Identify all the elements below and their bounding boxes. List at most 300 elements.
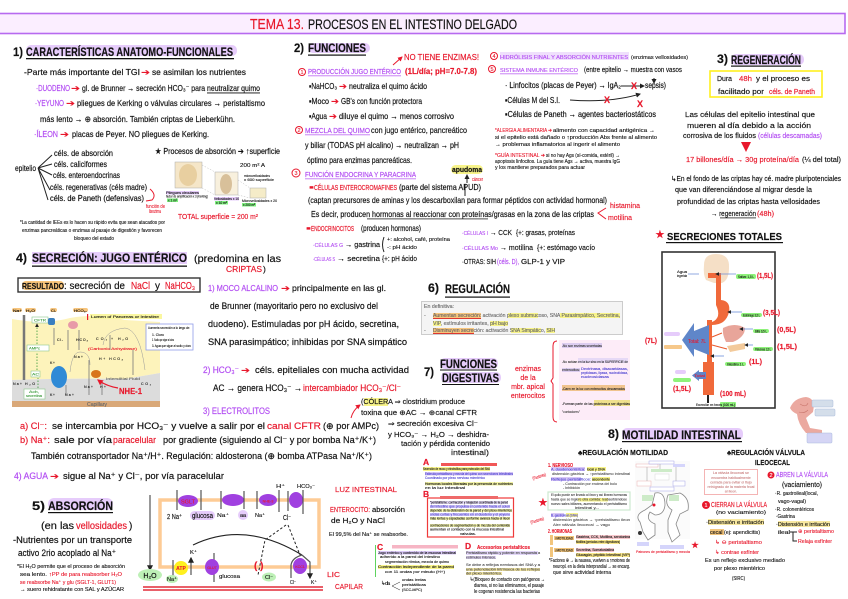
closed valve list: ↳ contrae esfínter bbox=[715, 549, 759, 556]
function 4: hidrólisis final: (enzimas vellosidades) bbox=[631, 55, 688, 61]
function 5: sistema inmune entérico: · Linfocitos (placas de Peyer) → IgA₂ bbox=[505, 80, 621, 90]
absorption surface figure: Microvellosidades x 20 bbox=[242, 199, 277, 203]
function 4: hidrólisis final bbox=[490, 52, 688, 61]
oesophagus and stomach bbox=[708, 273, 729, 325]
summary box: - bbox=[424, 328, 426, 334]
blue legend box: 3. Agua que sigue al sodio y cloro bbox=[152, 344, 191, 348]
epithelium cell types tree: epitelio bbox=[15, 163, 36, 173]
function 4: hidrólisis final: 4 bbox=[492, 54, 496, 60]
text: moco alcalino: SNA parasimpático; inhibidas por SNA simpático bbox=[208, 337, 407, 347]
absorption surface figure: x 1 m² bbox=[168, 198, 178, 202]
diagram: epithelial secretion cell: Na+ bbox=[13, 382, 22, 386]
note: cólera: (CÓLERA ⇒ clostridium produce bbox=[361, 397, 465, 406]
pink panel: enzymes: -No son enzimas secretadas bbox=[562, 343, 602, 348]
diagram: enterocyte absorption bbox=[138, 483, 323, 591]
yellow callout box: facilitado por bbox=[718, 89, 765, 96]
callout: no enzymes: NO TIENE ENZIMAS! bbox=[404, 52, 479, 62]
diagram: epithelial secretion cell: CFTR bbox=[34, 318, 46, 322]
summary box: Aumentan secreción: activación plexo submucoso, SNA Parasimpático, Secretina, bbox=[433, 313, 620, 319]
endocrine cell list: ·OTRAS: SIH bbox=[462, 259, 496, 266]
heading: section 2: 2) bbox=[294, 41, 304, 55]
closed valve list: 1 bbox=[704, 503, 708, 509]
notes: alergia and guía intestinal: y los mantiene preparados para actuar bbox=[495, 165, 585, 171]
endocrine cell list: {+: pH ácido bbox=[382, 256, 417, 263]
function 3: endocrina y paracrina: CÉLULAS ENTEROCROMAFINES bbox=[314, 183, 397, 192]
footnote on cell turnover: enzimas pancreáticas o enzimas al pasaje de digestión y favorecen bbox=[22, 228, 162, 234]
ATP pump bbox=[174, 561, 188, 575]
diagram: enterocyte absorption: 2 Na⁺ bbox=[167, 513, 182, 521]
heading: section 6: 6) bbox=[428, 281, 439, 295]
title bar: TEMA 13. bbox=[250, 17, 304, 33]
transporter: KCC1: KCC1 bbox=[295, 565, 305, 569]
diagram: enterocyte absorption: Cl⁻ bbox=[290, 580, 296, 586]
sodium pill bbox=[166, 575, 178, 583]
heading: section 2: FUNCIONES bbox=[308, 41, 366, 55]
function 5: sistema inmune entérico: SISTEMA INMUNE ENTÉRICO bbox=[500, 67, 579, 74]
secretion labels: Páncreas 1,5 L bbox=[755, 348, 771, 352]
heading: secreciones totales: SECRECIONES TOTALES bbox=[667, 231, 782, 243]
label: brush border enzymes: enzimas bbox=[515, 366, 542, 373]
text: HCO3: AC → genera HCO₃⁻ → bbox=[213, 383, 302, 393]
function 3: endocrina y paracrina: motilina bbox=[608, 215, 632, 222]
block B: red framed notes: contracciones de segmentación y de mezcla del contenido bbox=[430, 524, 510, 528]
absorption surface figure: x 200 m² bbox=[243, 203, 256, 207]
function 3: endocrina y paracrina: (producen hormonas) bbox=[361, 223, 421, 233]
diagram: epithelial secretion cell: Na+ bbox=[74, 355, 83, 359]
diagram: epithelial secretion cell: Cl- bbox=[57, 338, 64, 342]
function 3: endocrina y paracrina: ▪ bbox=[309, 182, 314, 192]
callout: no enzymes bbox=[393, 52, 479, 65]
litre values bbox=[645, 273, 797, 398]
section 3: regeneración bbox=[671, 52, 841, 218]
label: brush border enzymes bbox=[511, 341, 557, 422]
note: factores: neuropl. en la dieta interprandial → se encarg. bbox=[553, 564, 630, 570]
summary box: En definitiva: bbox=[424, 304, 454, 310]
diagram: enterocyte absorption: K⁺ bbox=[311, 579, 317, 586]
text: cell turnover: corrosiva de los fluidos bbox=[683, 133, 757, 140]
text: HCO3: céls. epiteliales con mucha actividad bbox=[255, 365, 409, 375]
text: absorption notes: vellosidades bbox=[76, 521, 127, 532]
note: cólera bbox=[351, 397, 490, 457]
diagram: epithelial secretion cell: H+ HCO₃ bbox=[99, 357, 124, 361]
endocrine cell list: → motilina bbox=[500, 245, 533, 252]
note: cólera: tación y pérdida contenido bbox=[401, 441, 490, 448]
pink panel: enzymes: -No actúan en la luz sino en la SUPERFICIE de bbox=[562, 359, 629, 364]
block B: red framed notes: depende de la distensión de la pared y del plexo mientérico bbox=[430, 508, 512, 512]
block C: notes: C bbox=[377, 542, 383, 552]
hormones bbox=[548, 529, 630, 557]
red star: ★ bbox=[538, 497, 548, 509]
labels: compartments: LIC bbox=[327, 572, 340, 579]
endocrine cell list: ·CÉLULAS G bbox=[313, 242, 343, 249]
result box: NaHCO₃ bbox=[165, 281, 195, 292]
litre values: (0,5L) bbox=[777, 327, 796, 334]
block A: notes: Secreción de moco y electrolitos para protección del SNA bbox=[423, 467, 490, 471]
endocrine cell list: ·CÉLULAS Mo bbox=[462, 245, 498, 252]
blue legend box: Aumenta secreción a lo largo de: bbox=[148, 326, 190, 330]
pink panel: enzymes: enterocitos: bbox=[562, 367, 580, 372]
block D: accesorios peristalticos: Accesorios peristalticos bbox=[477, 545, 530, 551]
yellow callout box: y el proceso es bbox=[756, 76, 811, 83]
block B: red framed notes: más lentas y espaciadas conforme avanza hacia el íleon bbox=[430, 516, 510, 520]
text: electrolitos: por gradiente (siguiendo al Cl⁻ y por bomba Na⁺/K⁺) bbox=[163, 435, 376, 445]
function 3: endocrina y paracrina: ▪ bbox=[306, 223, 311, 233]
block C: notes: ondas lentas bbox=[402, 578, 426, 582]
text: parts of the small intestine: gl. de Brunner → secreción HCO₃⁻ para neutralizar quimo bbox=[82, 83, 260, 93]
summary box: Disminuyen secreción: activación SNA Simpático, SIH bbox=[433, 328, 555, 334]
function 2: mezcla del quimo bbox=[296, 125, 467, 165]
gastroileal reflex bbox=[530, 513, 630, 527]
endocrine cell list: -: pH ácido bbox=[387, 245, 417, 251]
heading: section 3: REGENERACIÓN bbox=[731, 52, 801, 67]
section 4: secreción jugo entérico bbox=[12, 250, 490, 481]
block C: notes bbox=[375, 542, 458, 592]
diagram: epithelial secretion cell: secretina bbox=[26, 394, 42, 398]
block C: notes: adherido a la pared del intestino bbox=[380, 555, 440, 559]
note: factores: que sirve actividad interna bbox=[553, 570, 612, 576]
text: parts of the small intestine: ➔ bbox=[141, 67, 150, 77]
heading: section 4: SECRECIÓN: JUGO ENTÉRICO bbox=[32, 250, 187, 265]
note: cólera: y HCO₃⁻ → H₂O → deshidra- bbox=[388, 432, 490, 439]
nervous factors: distensión gástrica → ↑peristaltismo intestinal bbox=[552, 472, 630, 476]
absorption surface figure: microvellosidades bbox=[244, 174, 270, 178]
yellow callout box: céls. de Paneth bbox=[769, 89, 815, 96]
block D: accesorios peristalticos: del plexo mientérico. bbox=[466, 572, 502, 576]
text: absorption notes: se reabsorbe Na⁺ y glu (SGLT-1, GLUT1) bbox=[20, 579, 116, 586]
text: absorption notes: -Nutrientes por un transporte bbox=[13, 535, 132, 545]
text: electrolitos: paracelular bbox=[113, 435, 156, 445]
nervous factors: ascendente bbox=[592, 478, 610, 482]
title bar: PROCESOS EN EL INTESTINO DELGADO bbox=[308, 17, 517, 32]
labels: compartments bbox=[327, 487, 408, 591]
nervous factors bbox=[532, 463, 630, 490]
open valve list: Relaja esfínter bbox=[798, 539, 832, 545]
function 1: producción jugo entérico: 1 bbox=[300, 70, 304, 76]
heading: secreciones totales: ★ bbox=[655, 229, 665, 241]
NHE-1 callout: NHE-1 bbox=[119, 386, 142, 396]
text: cell turnover: (células descamadas) bbox=[758, 133, 822, 140]
hormones: Secretina, Somatostatina bbox=[576, 548, 614, 552]
block A: notes: A bbox=[423, 457, 429, 467]
gastroileal reflex: Aire válvula ileocecal → vago bbox=[553, 523, 610, 527]
text: HCO3: intercambiador HCO₃⁻/Cl⁻ bbox=[303, 383, 401, 393]
text: cell turnover: Las células del epitelio intestinal que bbox=[685, 112, 815, 119]
text: parts of the small intestine: ➔ bbox=[71, 83, 80, 93]
text: moco alcalino: 1) MOCO ALCALINO bbox=[208, 283, 278, 293]
text: electrolitos: se intercambia por HCO₃⁻ y vuelve a salir por el bbox=[52, 421, 265, 431]
hormones: Gastrina, CCK, Motilina, serotonina bbox=[576, 535, 630, 539]
left intestine outline bbox=[638, 493, 665, 540]
text: cell turnover bbox=[671, 112, 841, 218]
block A: notes: Coordinado por plexo nervioso mientérico bbox=[425, 476, 485, 480]
block B: red framed notes: B bbox=[423, 489, 429, 499]
text: HCO3: ➔ bbox=[241, 365, 250, 375]
pink panel: enzymes: -Caen en la luz con enterocitos descamados bbox=[562, 386, 625, 391]
section 2: funciones bbox=[292, 41, 688, 266]
closed valve list: ↳ ⊖ peristaltismo bbox=[715, 539, 762, 546]
head bbox=[704, 254, 729, 283]
yellow callout box: 48h bbox=[739, 76, 752, 83]
text: HCO3: 2) HCO₃⁻ bbox=[203, 365, 239, 375]
label: brush border enzymes: de la bbox=[520, 375, 536, 382]
heading: section 4: ) bbox=[263, 264, 266, 274]
footnote on cell turnover: bloqueo del estado bbox=[74, 236, 114, 242]
heading: section 1: 1) bbox=[13, 45, 23, 59]
diagram: epithelial secretion cell: CO₂ bbox=[96, 337, 108, 341]
hormones: Motilina (períodos entre digestiones) bbox=[576, 540, 620, 544]
pink box: ileocecal valve definition: cerrada para evitar el flujo bbox=[710, 480, 752, 484]
green box: hasta que se ingiere otra comida: reabsorbiéndose bbox=[551, 498, 627, 502]
text: electrolitos: sale por vía bbox=[54, 435, 112, 445]
litre values: (3,5L) bbox=[763, 310, 780, 317]
absorption surface figure: x 600 superficie bbox=[244, 178, 274, 182]
pink panel: enzymes: Dextrinasa, disacaridasas, bbox=[581, 367, 628, 371]
text: absorption notes: (en las bbox=[41, 521, 74, 532]
section 8: motilidad intestinal bbox=[578, 427, 834, 582]
text: moco alcalino: ➔ bbox=[281, 283, 290, 293]
closed valve list: (SIRC) bbox=[732, 576, 745, 582]
heading: section 4: CRIPTAS bbox=[226, 264, 262, 274]
section: secreciones totales bbox=[645, 229, 835, 443]
nervous factors: A. duodenoentérica: bbox=[551, 468, 585, 472]
diagram: enterocyte absorption: H⁺ bbox=[276, 483, 285, 490]
function 1: producción jugo entérico: diluye el quimo → menos corrosivo bbox=[339, 111, 454, 121]
endocrine cell list: {+: estómago vacío bbox=[537, 245, 595, 252]
function 5: sistema inmune entérico: sepsis) bbox=[645, 80, 666, 90]
epithelium cell types tree: céls. regenerativas (céls madre) bbox=[50, 182, 147, 192]
absorption surface figure: ★ Procesos de absorción ➔ ↑superficie bbox=[155, 146, 280, 156]
function 3: endocrina y paracrina: cáncer bbox=[472, 177, 483, 183]
text: absorption notes: activo 2rio acoplado al Na⁺ bbox=[18, 548, 116, 558]
diagram: epithelial secretion cell: H₂O bbox=[118, 337, 128, 341]
text: parts of the small intestine: -Parte más importante del TGI bbox=[24, 67, 140, 77]
function 5: sistema inmune entérico: ▪Células de Paneth → agentes bacteriostáticos bbox=[505, 109, 656, 119]
transporter: NHE-3: NHE-3 bbox=[263, 500, 273, 504]
diagram: epithelial secretion cell bbox=[12, 308, 193, 408]
function 1: producción jugo entérico: neutraliza el quimo ácido bbox=[349, 81, 427, 91]
heading: section 4 bbox=[16, 250, 281, 274]
pancreas bbox=[727, 343, 745, 352]
text: parts of the small intestine: se asimilan los nutrientes bbox=[152, 67, 246, 77]
text: parts of the small intestine: ➔ bbox=[60, 129, 69, 139]
block D: accesorios peristalticos: diarrea, si no las eliminamos, el pasaje bbox=[474, 583, 544, 589]
transporter: GLUT: GLUT bbox=[207, 566, 218, 570]
absorption surface figure: factor de amplificación x 3 (Kerking) bbox=[166, 194, 208, 198]
diagram: epithelial secretion cell: (Carbonic Anhydrase) bbox=[88, 347, 137, 351]
diagram: epithelial secretion cell: HCO₃ bbox=[76, 338, 89, 342]
blue arrow: absorbed total bbox=[682, 323, 709, 357]
pink box: ileocecal valve definition: retrógrado de la materia fecal bbox=[708, 485, 755, 489]
heading: section 1 bbox=[13, 44, 237, 59]
pink panel: enzymes bbox=[559, 340, 630, 420]
function 3: endocrina y paracrina: (parte del sistema APUD) bbox=[399, 182, 481, 192]
closed valve list: cecal (ej: apendicitis) bbox=[710, 530, 760, 536]
function 3: endocrina y paracrina: Es decir, producen hormonas al reaccionar con proteínas/grasas en la zona de las criptas bbox=[311, 209, 594, 219]
text: moco alcalino: duodeno). Estimuladas por pH ácido, secretina, bbox=[208, 319, 399, 329]
function 5: sistema inmune entérico: 5 bbox=[490, 67, 494, 73]
diagram: enterocyte absorption: Na⁺ bbox=[255, 512, 265, 519]
nervous factors: - Inhibición bbox=[563, 486, 580, 490]
result box bbox=[18, 278, 200, 292]
note: cólera: intestinal) bbox=[451, 450, 489, 457]
absorption surface figure: x 10 m² bbox=[216, 201, 228, 205]
closed valve list: Es un reflejo exclusivo mediado bbox=[705, 558, 785, 564]
block D: accesorios peristalticos: Peristaltismo rápido y potente en respuesta a bbox=[466, 551, 540, 555]
function 1: producción jugo entérico: GB's con función protectora bbox=[341, 96, 422, 106]
endocrine cell list: ·CÉLULAS S bbox=[313, 256, 335, 263]
text: cell turnover: profundidad de las criptas hasta vellosidades bbox=[677, 199, 821, 206]
heading: section 3: 3) bbox=[717, 52, 728, 66]
chloride pill bbox=[262, 572, 276, 582]
block C: notes: (SCC-MPC) bbox=[402, 588, 422, 592]
endocrine cell list: → gastrina bbox=[345, 242, 380, 249]
endocrine cell list bbox=[313, 230, 595, 266]
diagram: epithelial secretion cell: Interstitial Fluid bbox=[106, 377, 140, 381]
heading: section 6 bbox=[428, 281, 510, 298]
block D: accesorios peristalticos: ↳(Bloqueo de contacto con patógenos → bbox=[470, 576, 545, 583]
diagram: enterocyte absorption: glucosa bbox=[192, 513, 213, 520]
yellow callout box: Dura bbox=[717, 76, 732, 83]
epithelium cell types tree: céls. de Paneth (defensivas) bbox=[50, 193, 144, 203]
section 7: funciones digestivas bbox=[375, 340, 630, 595]
function 3: endocrina y paracrina: 3 bbox=[294, 171, 298, 177]
text: parts of the small intestine: ➔ bbox=[66, 98, 75, 108]
diagram: epithelial secretion cell: H₂O bbox=[26, 309, 35, 313]
nervous factors: 1. NERVIOSO bbox=[548, 463, 574, 469]
transporter: NHE-3 bbox=[259, 494, 277, 506]
labels: compartments: CAPILAR bbox=[335, 584, 363, 591]
text: electrolitos: b) Na⁺: bbox=[20, 435, 50, 445]
small figure: intestine detail bbox=[790, 397, 835, 443]
text: cell turnover: ↳En el fondo de las criptas hay cé. madre pluripotenciales bbox=[671, 175, 841, 183]
closed valve list bbox=[702, 500, 785, 582]
function 1: producción jugo entérico: ➔ bbox=[331, 96, 339, 106]
hormones: ↑MOTILIDAD bbox=[555, 536, 573, 540]
diagram: epithelial secretion cell: Na+ bbox=[65, 393, 74, 397]
right intestine outline bbox=[667, 493, 688, 542]
epithelium cell types tree: función de bbox=[146, 204, 165, 210]
green box: intestinal y... bbox=[575, 506, 599, 510]
heading: section 5: 5) bbox=[32, 499, 45, 513]
block B: red framed notes: "peristaltismo: contracción y relajación coordinada de la pared bbox=[430, 500, 508, 504]
subheading: regulación válvula: ♣REGULACIÓN VÁLVULA bbox=[727, 448, 805, 457]
heading: section 4: 4) bbox=[16, 251, 27, 265]
result box: NaCl bbox=[131, 281, 150, 292]
epithelium cell types tree bbox=[15, 148, 165, 215]
water pill: H₂O bbox=[143, 573, 157, 580]
notes: alergia and guía intestinal: si no hay Ags (sí-comida, estéril) → bbox=[546, 153, 620, 159]
epithelium cell types tree: lisozima bbox=[149, 209, 162, 215]
block C: notes: ↳ da bbox=[381, 580, 391, 587]
open valve list: ·Gastrina bbox=[776, 514, 796, 520]
notes: alergia and guía intestinal: *GUÍA INTESTINAL ➔ bbox=[495, 152, 545, 159]
text: moco alcalino bbox=[208, 283, 407, 347]
heading: section 7: 7) bbox=[424, 365, 434, 379]
notes: alergia and guía intestinal: si el epitelio está dañado o ↑producción Abs frente al alimento bbox=[495, 135, 657, 141]
hormones: 2. HORMONAS bbox=[548, 529, 572, 535]
block D: accesorios peristalticos: estímulos intensos. bbox=[466, 556, 496, 560]
labels: compartments: ENTEROCITO: bbox=[330, 507, 370, 514]
function 3: endocrina y paracrina: FUNCIÓN ENDOCRINA Y PARACRINA bbox=[305, 170, 416, 179]
heading: section 5: ABSORCIÓN bbox=[48, 498, 113, 513]
diagram: epithelial secretion cell: AC bbox=[32, 372, 40, 376]
open valve list: (vaciamiento) bbox=[782, 482, 822, 489]
absorption surface figure: Pliegues circulares bbox=[166, 191, 199, 195]
diagram: epithelial secretion cell: HCO₃- bbox=[74, 309, 88, 313]
open valve list: ABREN LA VÁLVULA bbox=[776, 470, 828, 479]
open valve list: ⊕ peristaltismo bbox=[798, 529, 834, 535]
block B: red framed notes: aumentan el contacto con la mucosa intestinal bbox=[430, 528, 504, 532]
function 5: sistema inmune entérico: (entre epitelio → muestra con vasos bbox=[584, 67, 682, 74]
function 3: endocrina y paracrina: histamina bbox=[610, 203, 640, 210]
labels: compartments: LUZ INTESTINAL bbox=[335, 487, 397, 494]
hormones: Glucagón, péptido intestinal (VIP) bbox=[576, 553, 630, 557]
diagram: motility control bbox=[635, 461, 690, 554]
blue legend box: 1. Cloro bbox=[152, 333, 164, 337]
closed valve list: (no vaciamiento) bbox=[716, 510, 766, 516]
block B: red framed notes: ondas cortas y frecuentes en el duodeno y el yeyuno bbox=[430, 512, 510, 516]
endocrine cell list: +: alcohol, café, proteína bbox=[387, 237, 451, 243]
text: electrolitos bbox=[20, 406, 379, 461]
open valve list: ·R. gastroileal(local, bbox=[775, 491, 818, 497]
liver bbox=[723, 325, 745, 342]
secretion labels: Agua bbox=[677, 270, 687, 274]
text: cell turnover: (48h) bbox=[757, 211, 774, 218]
diagram: enterocyte absorption: glucosa bbox=[219, 574, 241, 580]
pink panel: enzymes: -Forman parte de las proteínas a ser digeridas bbox=[562, 401, 630, 406]
section 1: características anatomo-funcionales bbox=[13, 44, 280, 242]
hormones: ↓MOTILIDAD bbox=[555, 548, 573, 552]
note: cólera: ⇒ secreción excesiva Cl⁻ bbox=[388, 421, 478, 428]
text: parts of the small intestine: pliegues de Kerking o válvulas circulares → peristaltismo bbox=[77, 98, 265, 108]
text: agua: 4) AGUA bbox=[14, 471, 48, 481]
text: cell turnover: (¼ del total) bbox=[802, 157, 841, 164]
text: HCO3 bbox=[203, 365, 409, 393]
text: absorption notes bbox=[13, 521, 132, 593]
sodium pill: Na⁺ bbox=[167, 576, 177, 583]
diagram: enterocyte absorption: K⁺ bbox=[190, 549, 197, 556]
endocrine cell list: GLP-1 y VIP bbox=[521, 259, 565, 266]
heading: section 8: MOTILIDAD INTESTINAL bbox=[622, 428, 741, 442]
gastroileal reflex: B. gastroileal (SNA) bbox=[551, 514, 578, 518]
text: absorption notes: → suero rehidratante con SAL y AZÚCAR bbox=[20, 586, 124, 593]
open valve list: ileal bbox=[778, 530, 790, 536]
block A: notes bbox=[423, 457, 513, 490]
text: moco alcalino: de Brunner (mayoritario pero no exclusivo del bbox=[210, 301, 378, 311]
open valve list bbox=[768, 470, 834, 545]
function 5: sistema inmune entérico: X bbox=[604, 95, 610, 105]
litre values: (100 mL) bbox=[720, 391, 746, 398]
notes: alergia and guía intestinal bbox=[495, 128, 657, 171]
footnote on cell turnover bbox=[20, 220, 165, 242]
litre values: (7L) bbox=[645, 338, 657, 345]
block A: notes: Hormonas locales liberadas por la presencia de nutrientes bbox=[425, 482, 513, 486]
text: electrolitos: canal CFTR bbox=[267, 421, 322, 431]
text: moco alcalino: principalmente en las gl. bbox=[292, 283, 386, 293]
green box: nuevo sales biliares, aumentando el peristaltismo bbox=[551, 502, 627, 506]
function 1: producción jugo entérico: ▪Moco bbox=[309, 96, 329, 106]
diagram: motility control: Patrones de peristaltismo y mezcla bbox=[636, 550, 690, 554]
text: electrolitos: También cotransportador Na⁺/H⁺. Regulación: aldosterona (⊕ bomba ATPasa Na⁺/K⁺) bbox=[31, 451, 372, 461]
pink box: ileocecal valve definition: La válvula ileocecal se bbox=[713, 471, 749, 475]
heading: section 4: (predomina en las bbox=[194, 254, 281, 265]
nervous factors: (Factores) bbox=[532, 472, 547, 481]
text: parts of the small intestine: ·YEYUNO bbox=[35, 98, 64, 108]
text: electrolitos: a) Cl⁻: bbox=[20, 421, 47, 431]
epithelium cell types tree: céls. de absorción bbox=[54, 148, 113, 158]
pink box: ileocecal valve definition: al íleon. bbox=[725, 490, 737, 494]
function 3: endocrina y paracrina: apudoma bbox=[452, 167, 482, 174]
